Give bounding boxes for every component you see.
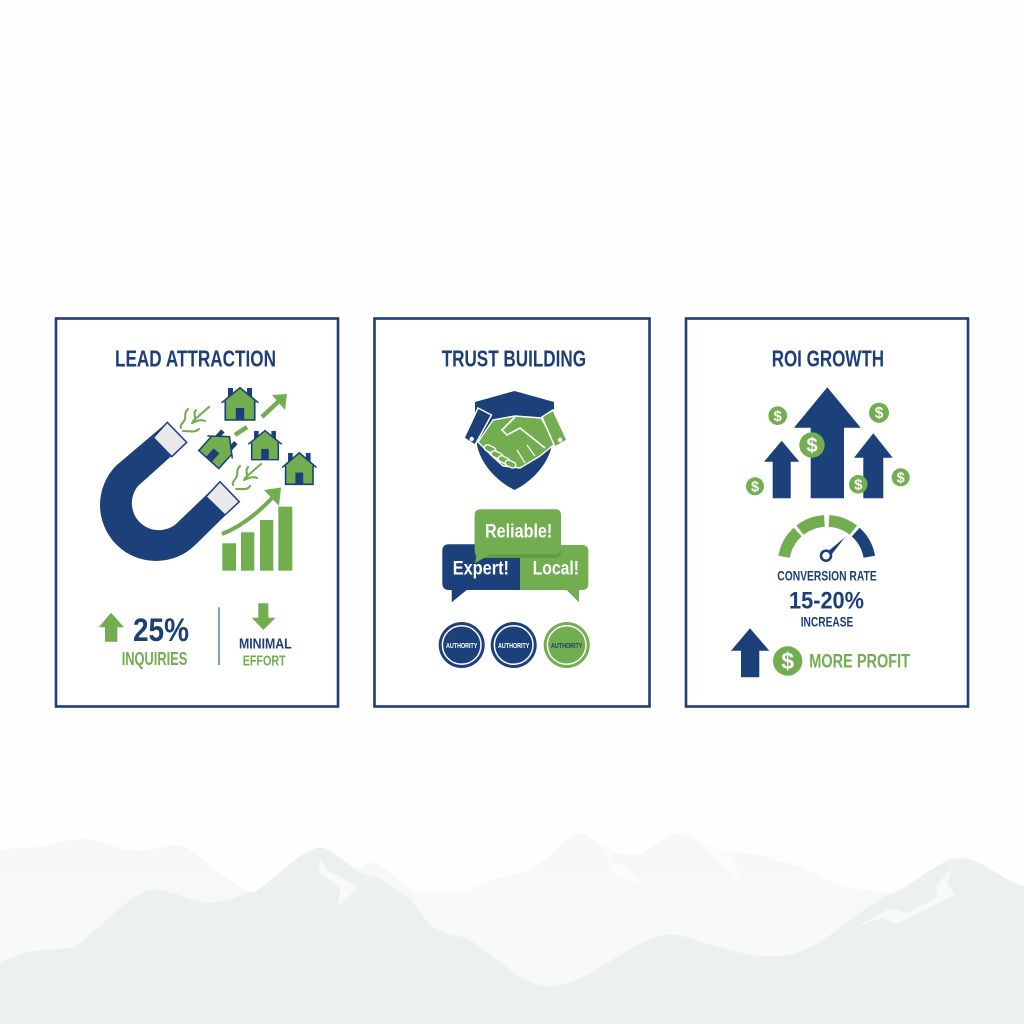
label: increase: INCREASE [801,614,853,630]
badge: authority 1: AUTHORITY [446,641,477,650]
icon: coin 3: $ [806,435,818,457]
stat label: minimal: MINIMAL [239,635,292,652]
icon: coin 2 [869,403,889,423]
icon: coin 1 [768,406,787,425]
badge: authority 2: AUTHORITY [498,641,529,650]
bar chart: rising green bars [222,507,292,571]
badge: authority 1 [439,622,485,668]
icon: coin 3 [799,432,825,458]
stat: up arrow [99,613,124,642]
badge: authority 3 [544,622,590,668]
icon: horseshoe magnet [100,422,239,561]
stat: 25%: 25% [133,612,189,648]
callout: reliable speech bubble [475,509,561,563]
icon: house 4 [282,453,316,484]
background: mountain range [0,832,1024,1024]
icon: profit coin: $ [781,648,794,674]
badge: authority 3: AUTHORITY [551,641,582,650]
callout text: expert: Expert! [453,558,509,579]
panel: trust building [374,318,650,706]
arrow: right growth arrow [854,433,893,498]
icon: profit coin [773,646,802,676]
callout: expert speech bubble [442,544,522,602]
arrow: profit arrow [731,628,769,677]
icon: coin 5 [849,475,868,494]
icon: house 3 [248,431,282,460]
panel: roi growth [686,318,968,706]
icon: coin 2: $ [875,405,884,422]
panel: lead attraction [56,318,338,706]
arrow: growth curve [222,488,281,534]
icon: upper magnetic field lines [181,407,209,432]
icon: coin 6: $ [897,470,905,486]
icon: lower magnetic field lines [233,464,261,489]
stat: 15-20%: 15-20% [789,587,864,614]
label: conversion rate: CONVERSION RATE [777,568,877,584]
arrow: rising dashed arrow [235,394,287,435]
icon: tilted house [196,425,242,471]
icon: house 1 [222,388,258,420]
arrow: large growth arrow [794,387,861,498]
icon: coin 5: $ [854,477,863,494]
callout text: reliable: Reliable! [485,522,552,543]
icon: coin 4 [746,477,764,496]
heading: lead attraction: LEAD ATTRACTION [115,346,276,372]
badge: authority 2 [491,622,537,668]
chart: conversion gauge [784,521,869,561]
icon: coin 4: $ [751,480,759,496]
label: more profit: MORE PROFIT [809,651,910,673]
callout text: local: Local! [533,558,579,579]
icon: coin 1: $ [774,408,783,425]
heading: trust building: TRUST BUILDING [442,346,586,372]
icon: coin 6 [892,468,910,486]
heading: roi growth: ROI GROWTH [772,346,884,372]
stat label: inquiries: INQUIRIES [122,648,187,669]
icon: shield with handshake [464,391,567,490]
callout: local speech bubble [520,545,588,602]
stat label: effort: EFFORT [243,653,286,670]
arrow: left growth arrow [764,441,799,498]
stat: down arrow [252,603,276,630]
